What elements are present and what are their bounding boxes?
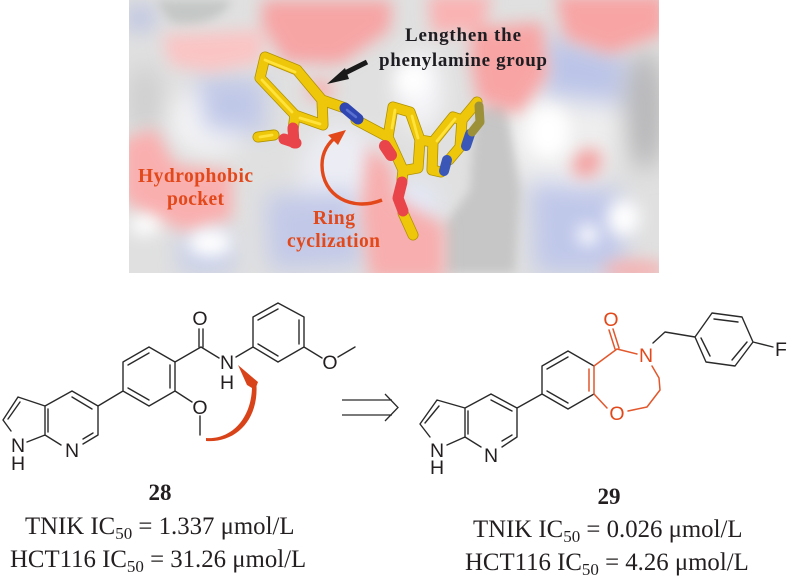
protein surface: [122, 0, 667, 280]
compound 28 label and activity: 28: [148, 480, 172, 505]
compound 29 label and activity: TNIK IC: [473, 516, 563, 543]
atom labels 29: H: [430, 457, 444, 479]
atom labels 29: N: [430, 440, 444, 462]
compound 29 structure: O: [609, 403, 625, 425]
atom labels 29: N: [484, 445, 498, 467]
compound 28 label and activity: HCT116 IC: [10, 546, 127, 573]
compound 29 structure: N: [639, 345, 653, 367]
atom labels 29: [430, 339, 787, 479]
compound 29 label and activity: = 0.026 μmol/L: [580, 516, 743, 543]
atom labels 28: N: [11, 435, 25, 457]
label: ring cyclization: [287, 208, 380, 252]
ligand sticks: [258, 57, 480, 235]
arrow: cyclization on 28: [206, 365, 258, 441]
label: hydrophobic pocket: [138, 166, 253, 210]
label: ring cyclization: Ring: [313, 208, 355, 229]
atom labels 28: O: [192, 397, 208, 419]
compound 28 label and activity: = 1.337 μmol/L: [132, 513, 295, 540]
label: ring cyclization: cyclization: [287, 231, 380, 252]
compound 28 label and activity: [10, 480, 306, 576]
atom labels 28: O: [322, 352, 338, 374]
atom labels 28: [11, 308, 338, 475]
atom labels 28: O: [192, 308, 208, 330]
label: lengthen the phenylamine group: [379, 25, 547, 71]
label: lengthen the phenylamine group: Lengthen the: [405, 25, 521, 46]
compound 29 label and activity: 50: [563, 527, 580, 546]
atom labels 28: H: [11, 453, 25, 475]
atom labels 28: N: [220, 352, 234, 374]
compound 29 label and activity: [465, 484, 749, 576]
compound 28 label and activity: 50: [115, 524, 132, 543]
compound 29 label and activity: 29: [598, 484, 620, 509]
label: hydrophobic pocket: Hydrophobic: [138, 166, 253, 187]
compound 29 label and activity: = 4.26 μmol/L: [599, 549, 749, 576]
compound 28 label and activity: TNIK IC: [25, 513, 115, 540]
compound 28 label and activity: 50: [127, 557, 144, 576]
nitrogen and oxygen atoms: [345, 108, 358, 119]
atom labels 28: H: [220, 372, 234, 394]
arrow: ring cyclization (orange): [322, 130, 382, 204]
compound 28 structure: [3, 303, 355, 475]
atom labels 28: N: [65, 440, 79, 462]
arrow: lengthen (black): [327, 62, 367, 84]
label: hydrophobic pocket: pocket: [167, 189, 224, 210]
retrosynthesis open arrow: [342, 394, 398, 421]
atom labels 29: F: [775, 339, 787, 361]
compound 29 label and activity: HCT116 IC: [465, 549, 582, 576]
compound 29 structure: [420, 309, 787, 479]
label: lengthen the phenylamine group: phenylamine group: [379, 50, 547, 71]
compound 28 label and activity: = 31.26 μmol/L: [144, 546, 306, 573]
panel: docking surface with ligand: [122, 0, 667, 280]
compound 29 structure: O: [603, 309, 619, 331]
